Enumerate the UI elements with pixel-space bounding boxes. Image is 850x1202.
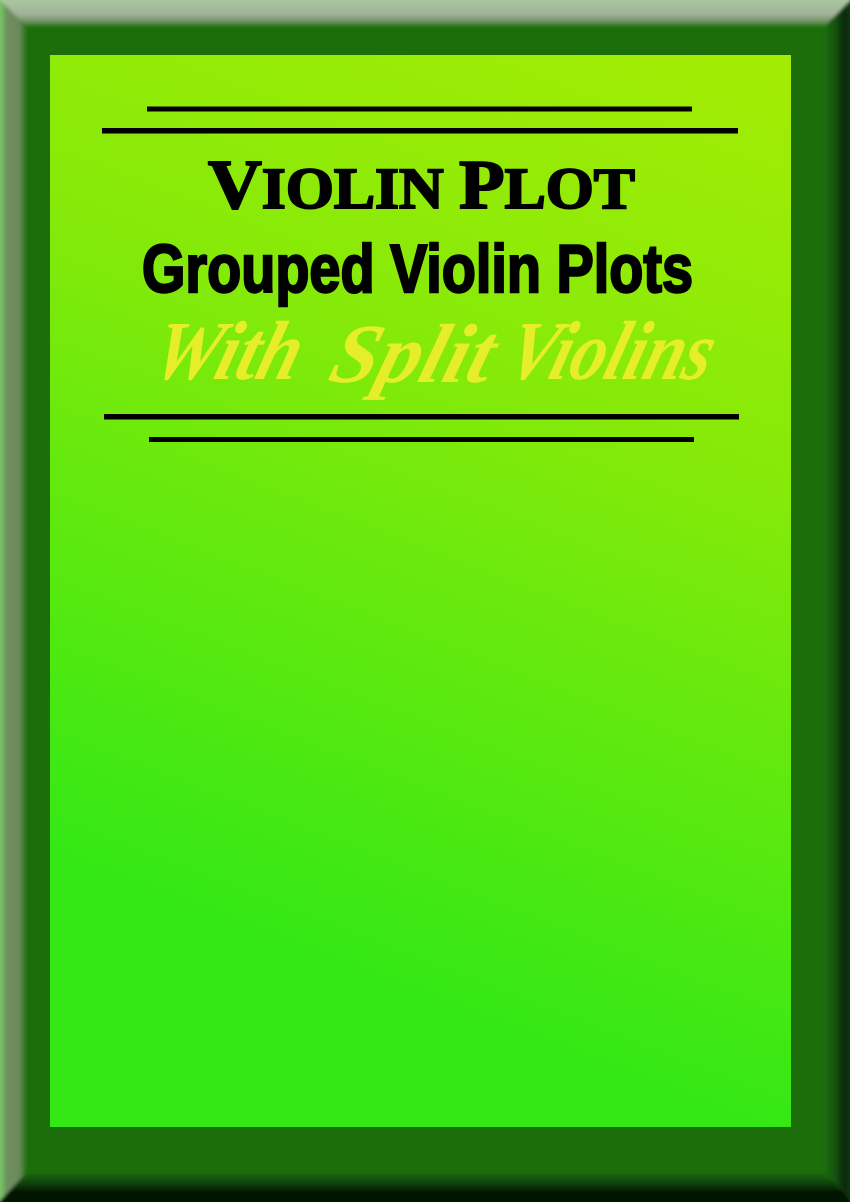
tagline: With Split Violins: Violins xyxy=(498,305,727,398)
bottom short rule xyxy=(149,437,694,442)
tagline: With Split Violins: Split xyxy=(321,308,510,401)
panel: green gradient background xyxy=(50,55,791,1127)
tagline: With Split Violins xyxy=(143,305,727,401)
subtitle: Grouped Violin Plots: Grouped Violin Plots xyxy=(142,231,693,307)
bottom long rule xyxy=(104,414,739,420)
top short rule xyxy=(147,106,692,112)
tagline: With Split Violins: With xyxy=(143,305,315,398)
title: Violin Plot: VIOLIN PLOT xyxy=(208,147,635,224)
top long rule xyxy=(102,128,738,134)
